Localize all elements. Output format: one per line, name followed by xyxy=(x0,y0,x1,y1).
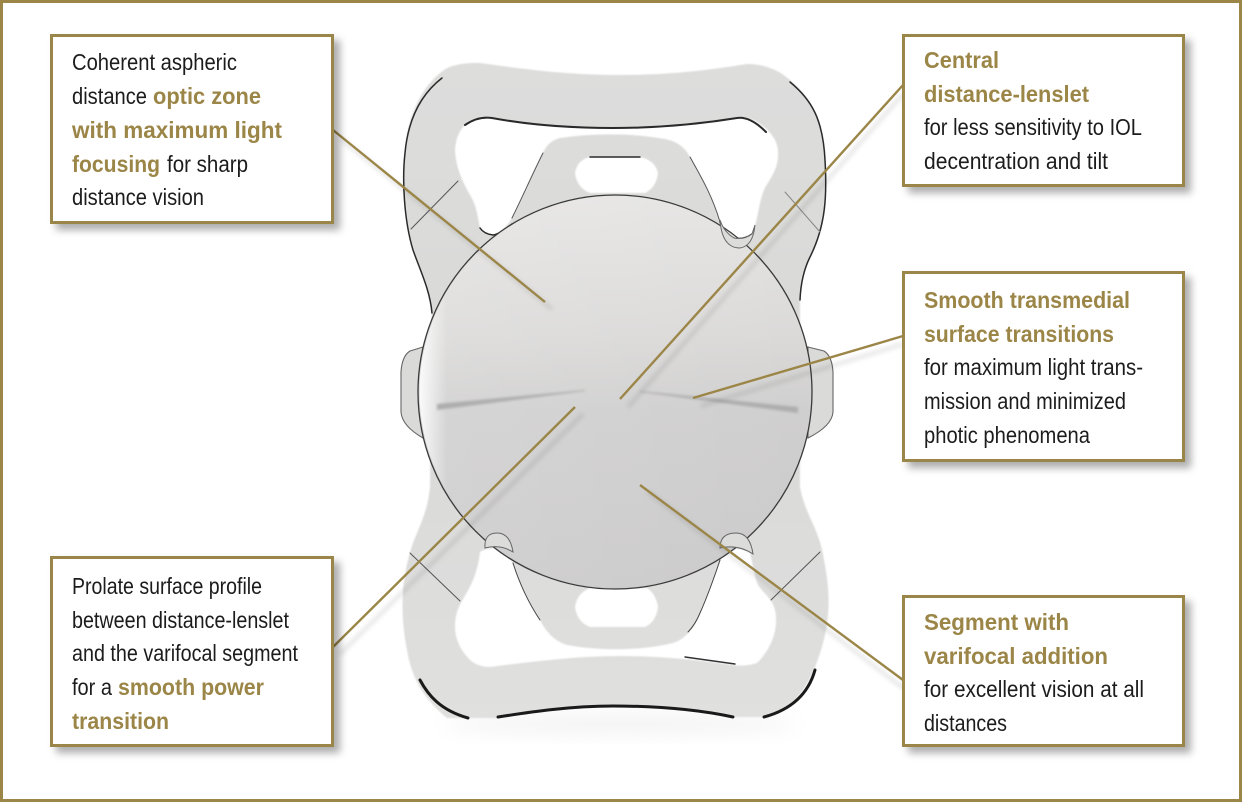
callout: prolate surface profile: Prolate surface profile xyxy=(72,573,262,599)
callout: varifocal segment: distances xyxy=(924,710,1007,736)
callout: optic zone: distance vision xyxy=(72,184,204,210)
callout: smooth transmedial transitions xyxy=(904,272,1184,460)
callout: central distance-lenslet: distance-lenslet xyxy=(924,81,1089,107)
callout: smooth transmedial transitions: Smooth transmedial xyxy=(924,287,1130,313)
leader line shadows xyxy=(340,94,903,688)
callout: central distance-lenslet: decentration and tilt xyxy=(924,148,1109,174)
callout: prolate surface profile: and the varifocal segment xyxy=(72,640,299,666)
callout: prolate surface profile: smooth power xyxy=(118,674,264,700)
callout: varifocal segment xyxy=(904,596,1184,746)
callout: optic zone: optic zone xyxy=(153,83,261,109)
lens edge highlight xyxy=(420,196,810,588)
leader line: varifocal segment xyxy=(640,485,903,680)
callout: prolate surface profile xyxy=(52,558,332,746)
haptic outlines xyxy=(404,78,826,718)
callout: smooth transmedial transitions: for maximum light trans- xyxy=(924,354,1143,380)
callout: optic zone: distance xyxy=(72,83,147,109)
callout: optic zone: with maximum light xyxy=(71,117,282,143)
leader line: central distance-lenslet xyxy=(620,85,903,399)
haptic body with openings xyxy=(402,63,829,718)
callout: optic zone: focusing xyxy=(72,151,160,177)
lens optic xyxy=(418,195,812,589)
callout: varifocal segment: for excellent vision at all xyxy=(924,676,1144,702)
callout: central distance-lenslet: for less sensitivity to IOL xyxy=(924,114,1142,140)
leader line: prolate surface xyxy=(333,407,575,647)
callout: varifocal segment: varifocal addition xyxy=(924,643,1108,669)
callout: smooth transmedial transitions: surface transitions xyxy=(924,321,1114,347)
transition lines on the lens xyxy=(437,390,798,413)
callout: central distance-lenslet: Central xyxy=(924,47,999,73)
callout: prolate surface profile: transition xyxy=(72,708,169,734)
leader line: optic zone xyxy=(333,130,545,302)
callout: central distance-lenslet xyxy=(904,36,1184,186)
callout: optic zone xyxy=(52,36,332,222)
callout: optic zone: Coherent aspheric xyxy=(72,49,237,75)
ground shadow xyxy=(440,717,800,731)
callout: optic zone: for sharp xyxy=(167,151,248,177)
callout: varifocal segment: Segment with xyxy=(924,609,1069,635)
leader line: transmedial transitions xyxy=(693,336,903,398)
callout: smooth transmedial transitions: mission and minimized xyxy=(924,388,1126,414)
lens illustration xyxy=(401,63,833,731)
callout: prolate surface profile: between distance-lenslet xyxy=(72,607,290,633)
callout: prolate surface profile: for a xyxy=(72,674,112,700)
lens notches xyxy=(485,220,755,554)
side tabs xyxy=(401,347,833,438)
callout: smooth transmedial transitions: photic phenomena xyxy=(924,422,1090,448)
